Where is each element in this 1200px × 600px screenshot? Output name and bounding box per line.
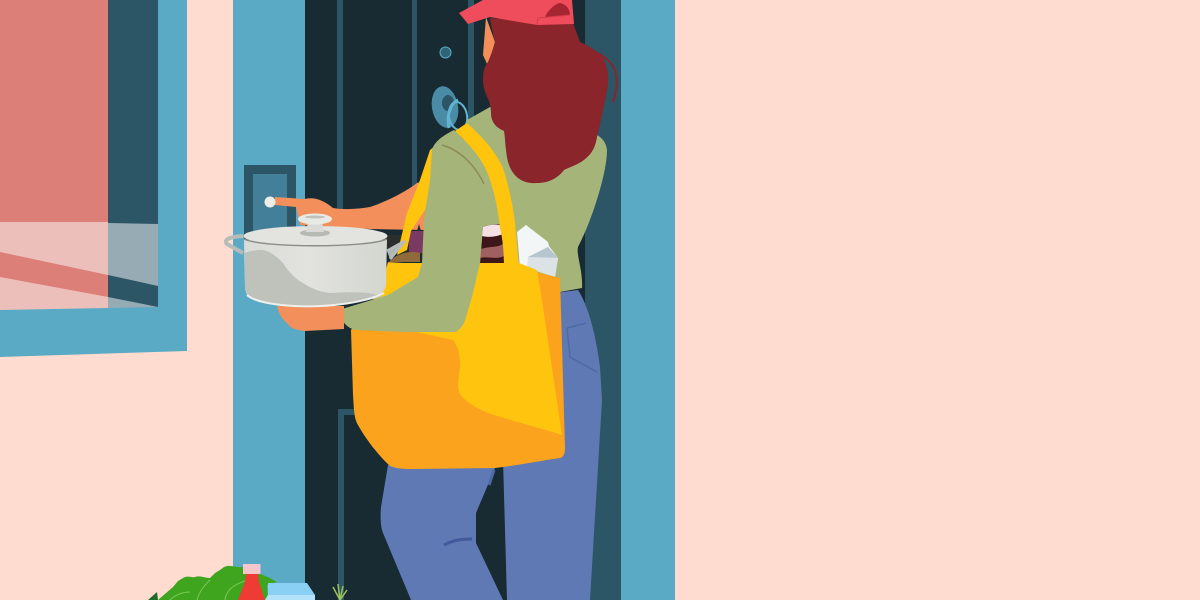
arm and finger pressing bell [264, 178, 432, 230]
door knocker [429, 84, 469, 131]
door [305, 0, 621, 600]
green sleeve [342, 130, 495, 332]
hair [483, 18, 617, 183]
left bag strap [397, 130, 454, 255]
yellow tote bag [351, 262, 565, 469]
jar in bag [480, 224, 504, 263]
milk carton in bag [517, 225, 558, 277]
doorbell plate [244, 165, 296, 240]
cap [459, 0, 574, 25]
shirt body [455, 107, 607, 292]
door frame [233, 0, 675, 600]
milk carton [265, 583, 315, 600]
herbs [333, 584, 347, 600]
strap over shoulder [455, 123, 519, 268]
door peephole [440, 47, 451, 58]
lettuce [148, 566, 277, 600]
face and neck [483, 17, 495, 66]
ketchup bottle [238, 564, 265, 600]
window [0, 0, 187, 357]
jeans [381, 290, 602, 600]
lower hand holding pot [277, 306, 344, 331]
groceries on the ground [148, 564, 347, 600]
cooking pot [226, 214, 405, 307]
groceries in bag: purple box, potato, dark item [387, 224, 425, 262]
